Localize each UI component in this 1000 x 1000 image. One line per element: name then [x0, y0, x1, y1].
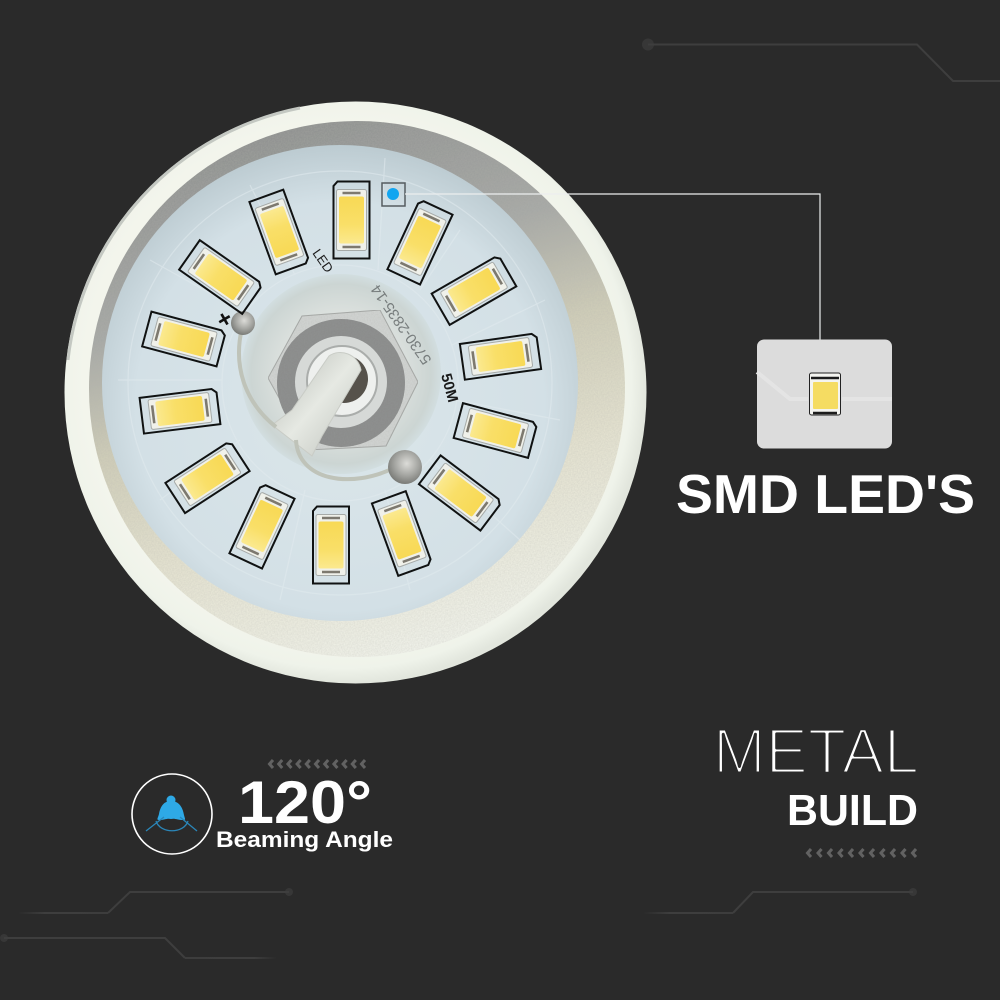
heading: METAL: METAL — [713, 715, 919, 787]
LED 4 — [460, 333, 541, 380]
LED 11 — [140, 388, 220, 434]
icon: beam angle badge — [132, 774, 212, 854]
heading: BUILD: BUILD — [787, 786, 918, 835]
outer white shell — [64, 102, 646, 684]
circuit line: bottom left lower — [0, 934, 277, 959]
circuit line: bottom left upper — [18, 888, 293, 914]
solder ball left — [231, 311, 255, 335]
solder ball right — [388, 450, 422, 484]
circuit line: bottom right — [643, 888, 917, 914]
board traces — [118, 158, 560, 600]
LED 12 — [142, 312, 226, 366]
circuit line: top right — [642, 38, 1000, 81]
grey shell edge upper left — [68, 108, 300, 360]
solder ring — [307, 346, 377, 416]
bulb photo: LED board seen from above — [64, 102, 646, 684]
LED 9 — [229, 484, 295, 568]
centre hole — [320, 355, 368, 403]
nut inner ring — [295, 336, 387, 428]
braided wire — [239, 328, 396, 479]
LED 8 — [313, 506, 349, 584]
nut washer — [277, 319, 405, 447]
LED 5 — [454, 403, 537, 458]
inner threaded band — [89, 121, 625, 657]
wire sleeve — [272, 352, 361, 456]
LED 1 — [334, 182, 370, 258]
label: Beaming Angle: Beaming Angle — [216, 827, 393, 852]
LED 13 — [179, 240, 263, 314]
LED 7 — [372, 491, 432, 576]
LED 10 — [165, 441, 250, 513]
board print LED: LED — [310, 246, 336, 275]
LED 3 — [432, 255, 516, 325]
LED circuit board — [102, 145, 578, 621]
printed marking on disc: 5730-2835-14 — [368, 281, 435, 367]
callout marker and leader line — [382, 183, 820, 340]
LED 14 — [249, 190, 310, 274]
chevron row: metal build — [808, 849, 916, 857]
hex nut — [268, 310, 418, 450]
LED 6 — [419, 455, 502, 531]
board print 50MA: 50M — [437, 372, 461, 404]
heading: SMD LED'S: SMD LED'S — [676, 463, 975, 525]
chevron row: beam angle — [270, 760, 365, 768]
value: 120 degrees: 120° — [238, 769, 372, 836]
plus mark: + — [212, 304, 238, 335]
LED 2 — [387, 200, 453, 284]
central translucent disc — [241, 274, 441, 474]
callout card: SMD LED close-up — [757, 340, 892, 448]
